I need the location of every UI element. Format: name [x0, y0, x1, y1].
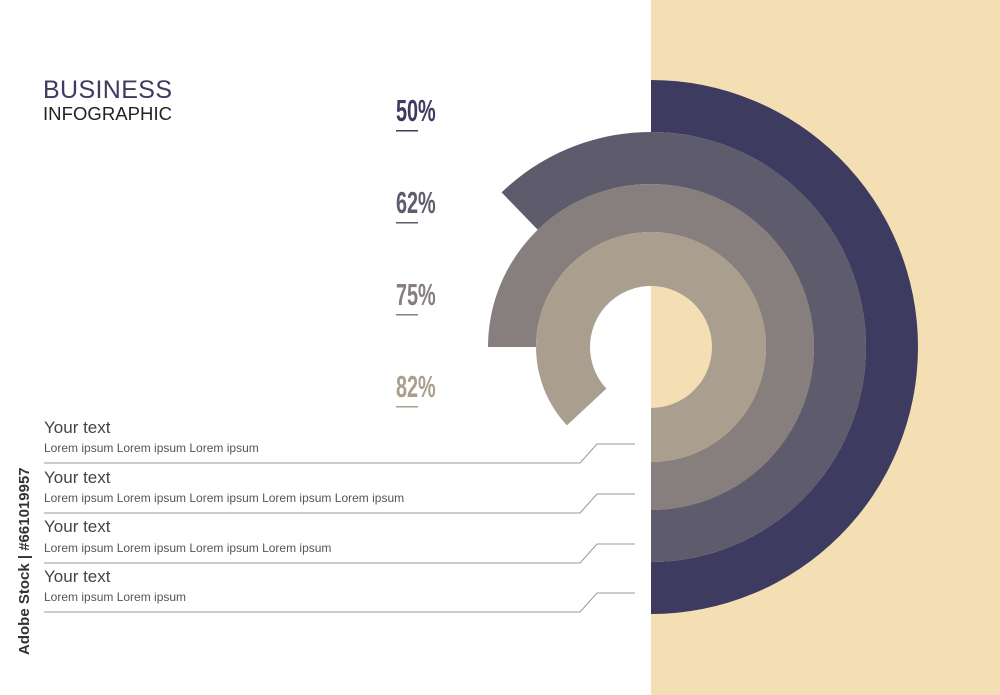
title: BUSINESS	[43, 76, 172, 104]
item 3: Lorem ipsum Lorem ipsum Lorem ipsum Lorem ipsum	[44, 541, 331, 555]
item 3	[44, 517, 331, 555]
ring 82%	[536, 232, 766, 462]
item 2	[44, 468, 404, 505]
item 3: Your text	[44, 517, 111, 536]
chart: concentric rings	[488, 80, 918, 614]
item 1: Lorem ipsum Lorem ipsum Lorem ipsum	[44, 441, 259, 455]
ring 75%	[488, 184, 814, 510]
item 2: Lorem ipsum Lorem ipsum Lorem ipsum Lorem ipsum Lorem ipsum	[44, 491, 404, 505]
item 1	[44, 418, 259, 455]
text list	[44, 444, 635, 612]
percentage labels: 62%	[396, 184, 436, 220]
ring 50%	[651, 80, 918, 614]
item 1: Your text	[44, 418, 111, 437]
item 2: Your text	[44, 468, 111, 487]
ring 62%	[502, 132, 866, 562]
percentage labels: 82%	[396, 368, 436, 404]
title: INFOGRAPHIC	[43, 103, 172, 124]
item 4	[44, 567, 186, 604]
percentage labels: 50%	[396, 92, 436, 128]
watermark vertical text: Adobe Stock | #661019957	[16, 467, 33, 655]
percentage labels	[396, 92, 436, 408]
percentage labels: 75%	[396, 276, 436, 312]
title	[43, 76, 172, 124]
item 4: Lorem ipsum Lorem ipsum	[44, 590, 186, 604]
item 4: Your text	[44, 567, 111, 586]
